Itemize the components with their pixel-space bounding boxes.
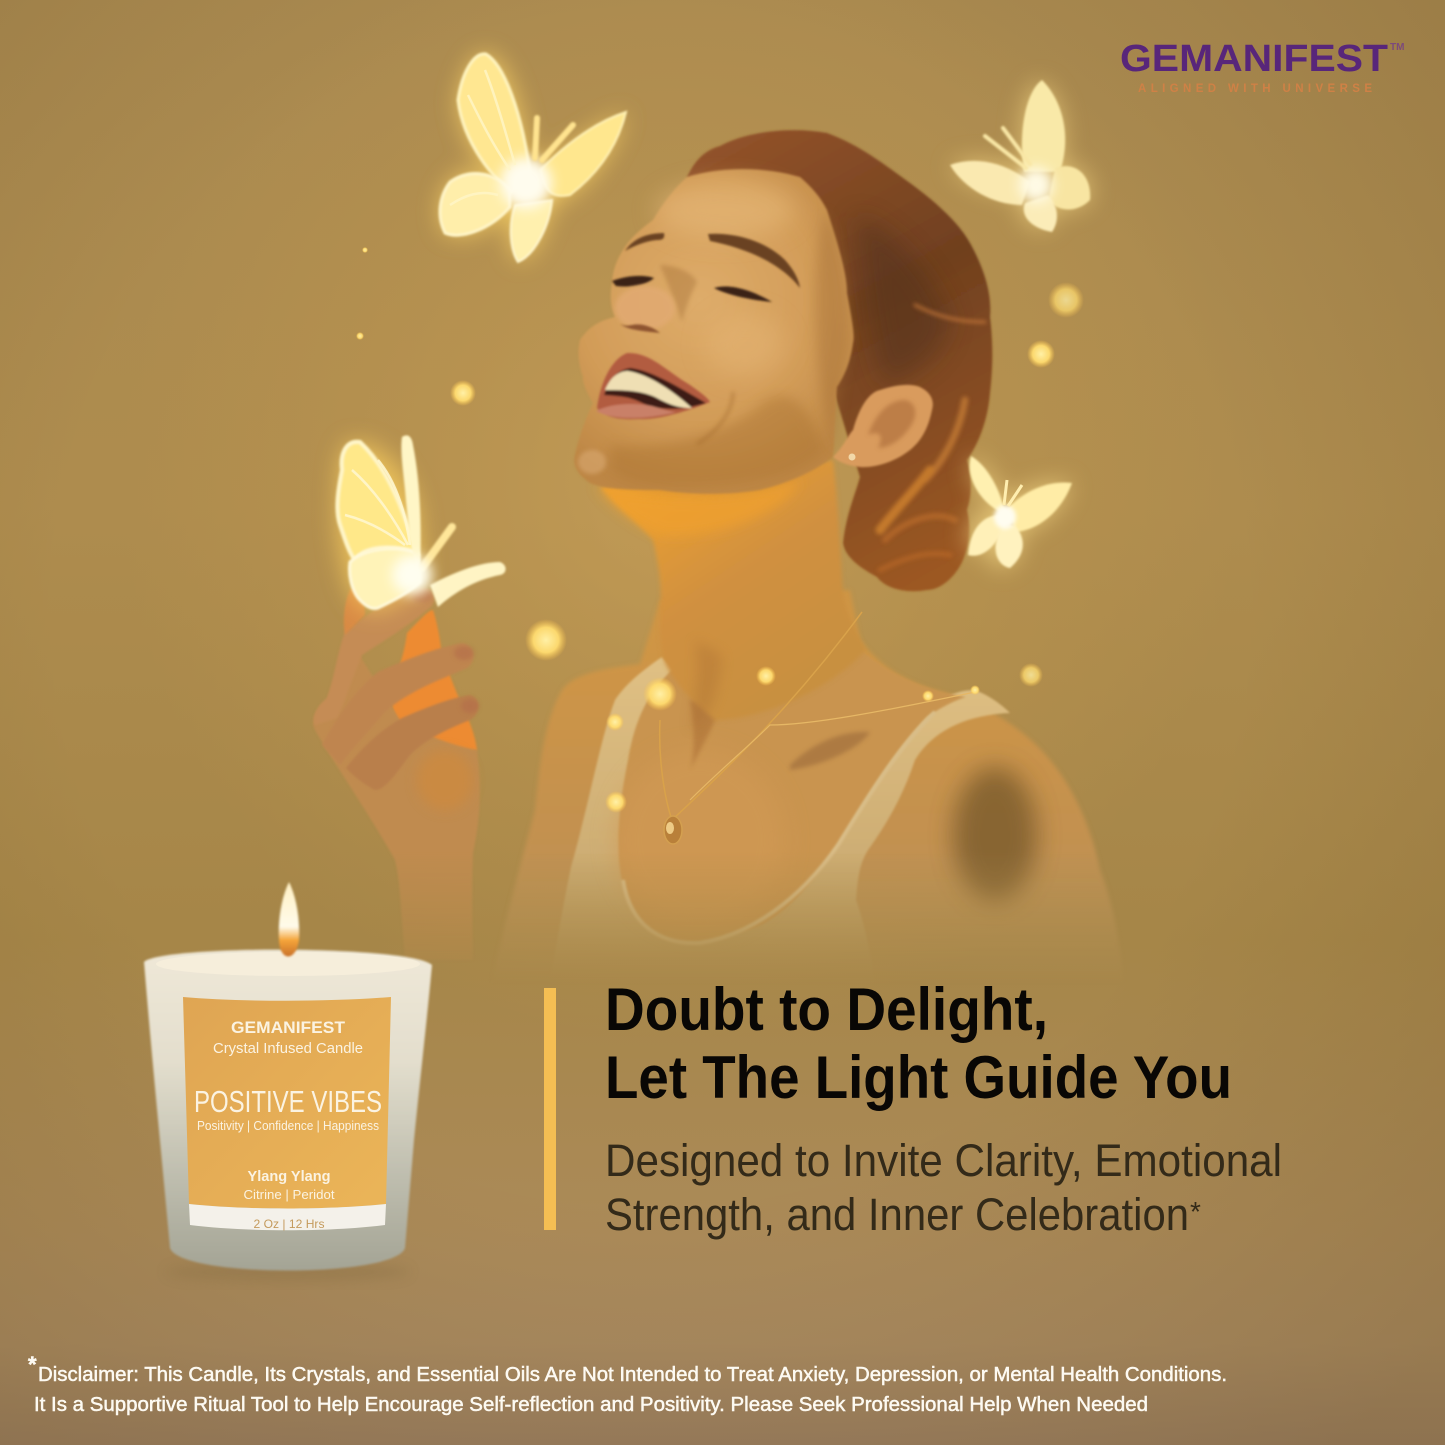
label text: POSITIVE VIBES [194, 1084, 382, 1119]
mouth [596, 353, 710, 419]
arm and shoulders [510, 590, 1112, 928]
eyebrows [625, 233, 664, 251]
label text: 2 Oz | 12 Hrs [254, 1217, 324, 1231]
arm shadow [953, 767, 1037, 903]
subheading: Designed to Invite Clarity, Emotional [605, 1135, 1282, 1186]
disclaimer: It Is a Supportive Ritual Tool to Help Encourage Self-reflection and Positivity. Please Seek Professional Help When Needed [34, 1394, 1148, 1416]
label [183, 997, 391, 1208]
glass [144, 950, 432, 1270]
back finger [344, 587, 365, 635]
subheading: Strength, and Inner Celebration [605, 1189, 1189, 1240]
fingertips [412, 590, 479, 713]
neck [600, 460, 866, 720]
neck hollow [697, 649, 718, 710]
label text [194, 1018, 382, 1231]
label text: Positivity | Confidence | Happiness [197, 1119, 379, 1133]
collarbone shadow [790, 732, 870, 770]
subheading [605, 1135, 1282, 1240]
palm glow [419, 752, 471, 808]
accent bar [544, 988, 556, 1230]
ear [833, 385, 933, 467]
label text: GEMANIFEST [231, 1018, 346, 1037]
chest skin [618, 640, 966, 942]
candle [144, 882, 432, 1282]
headline: Let The Light Guide You [605, 1044, 1232, 1111]
butterfly top left [440, 53, 626, 262]
candle shadow [166, 1262, 410, 1282]
label text: Crystal Infused Candle [213, 1041, 363, 1057]
butterfly top right [950, 80, 1091, 232]
face [574, 169, 854, 494]
headline [605, 976, 1232, 1111]
nose [615, 286, 675, 330]
hand [313, 587, 480, 960]
label text: Citrine | Peridot [244, 1187, 335, 1202]
disclaimer: Disclaimer: This Candle, Its Crystals, and Essential Oils Are Not Intended to Treat Anxiety, Depression, or Mental Health Conditions. [38, 1364, 1227, 1386]
flame [279, 882, 299, 956]
chin light [578, 450, 606, 474]
logo [1120, 38, 1404, 95]
glowing orbs [356, 247, 1084, 813]
butterfly right [967, 456, 1072, 568]
hair highlights [880, 305, 985, 570]
headline: Doubt to Delight, [605, 976, 1048, 1043]
logo: GEMANIFEST [1120, 38, 1388, 80]
logo: ALIGNED WITH UNIVERSE [1138, 83, 1372, 95]
hair back and bun [687, 130, 992, 591]
ring finger [346, 695, 478, 790]
wax [156, 952, 420, 976]
necklace [660, 612, 975, 844]
butterfly in hand [337, 435, 506, 610]
index finger [316, 591, 434, 714]
disclaimer: * [28, 1352, 37, 1377]
eyes [612, 276, 654, 287]
subheading: * [1190, 1196, 1201, 1227]
face shading [610, 396, 825, 488]
middle finger [323, 644, 472, 748]
tank top [562, 656, 1010, 924]
hand palm and wrist [313, 659, 480, 940]
glowing thumb [391, 610, 477, 757]
disclaimer [28, 1352, 1227, 1416]
label text: Ylang Ylang [248, 1169, 330, 1185]
neckline trim [623, 712, 935, 943]
woman illustration [490, 130, 1125, 990]
logo: TM [1390, 42, 1404, 53]
